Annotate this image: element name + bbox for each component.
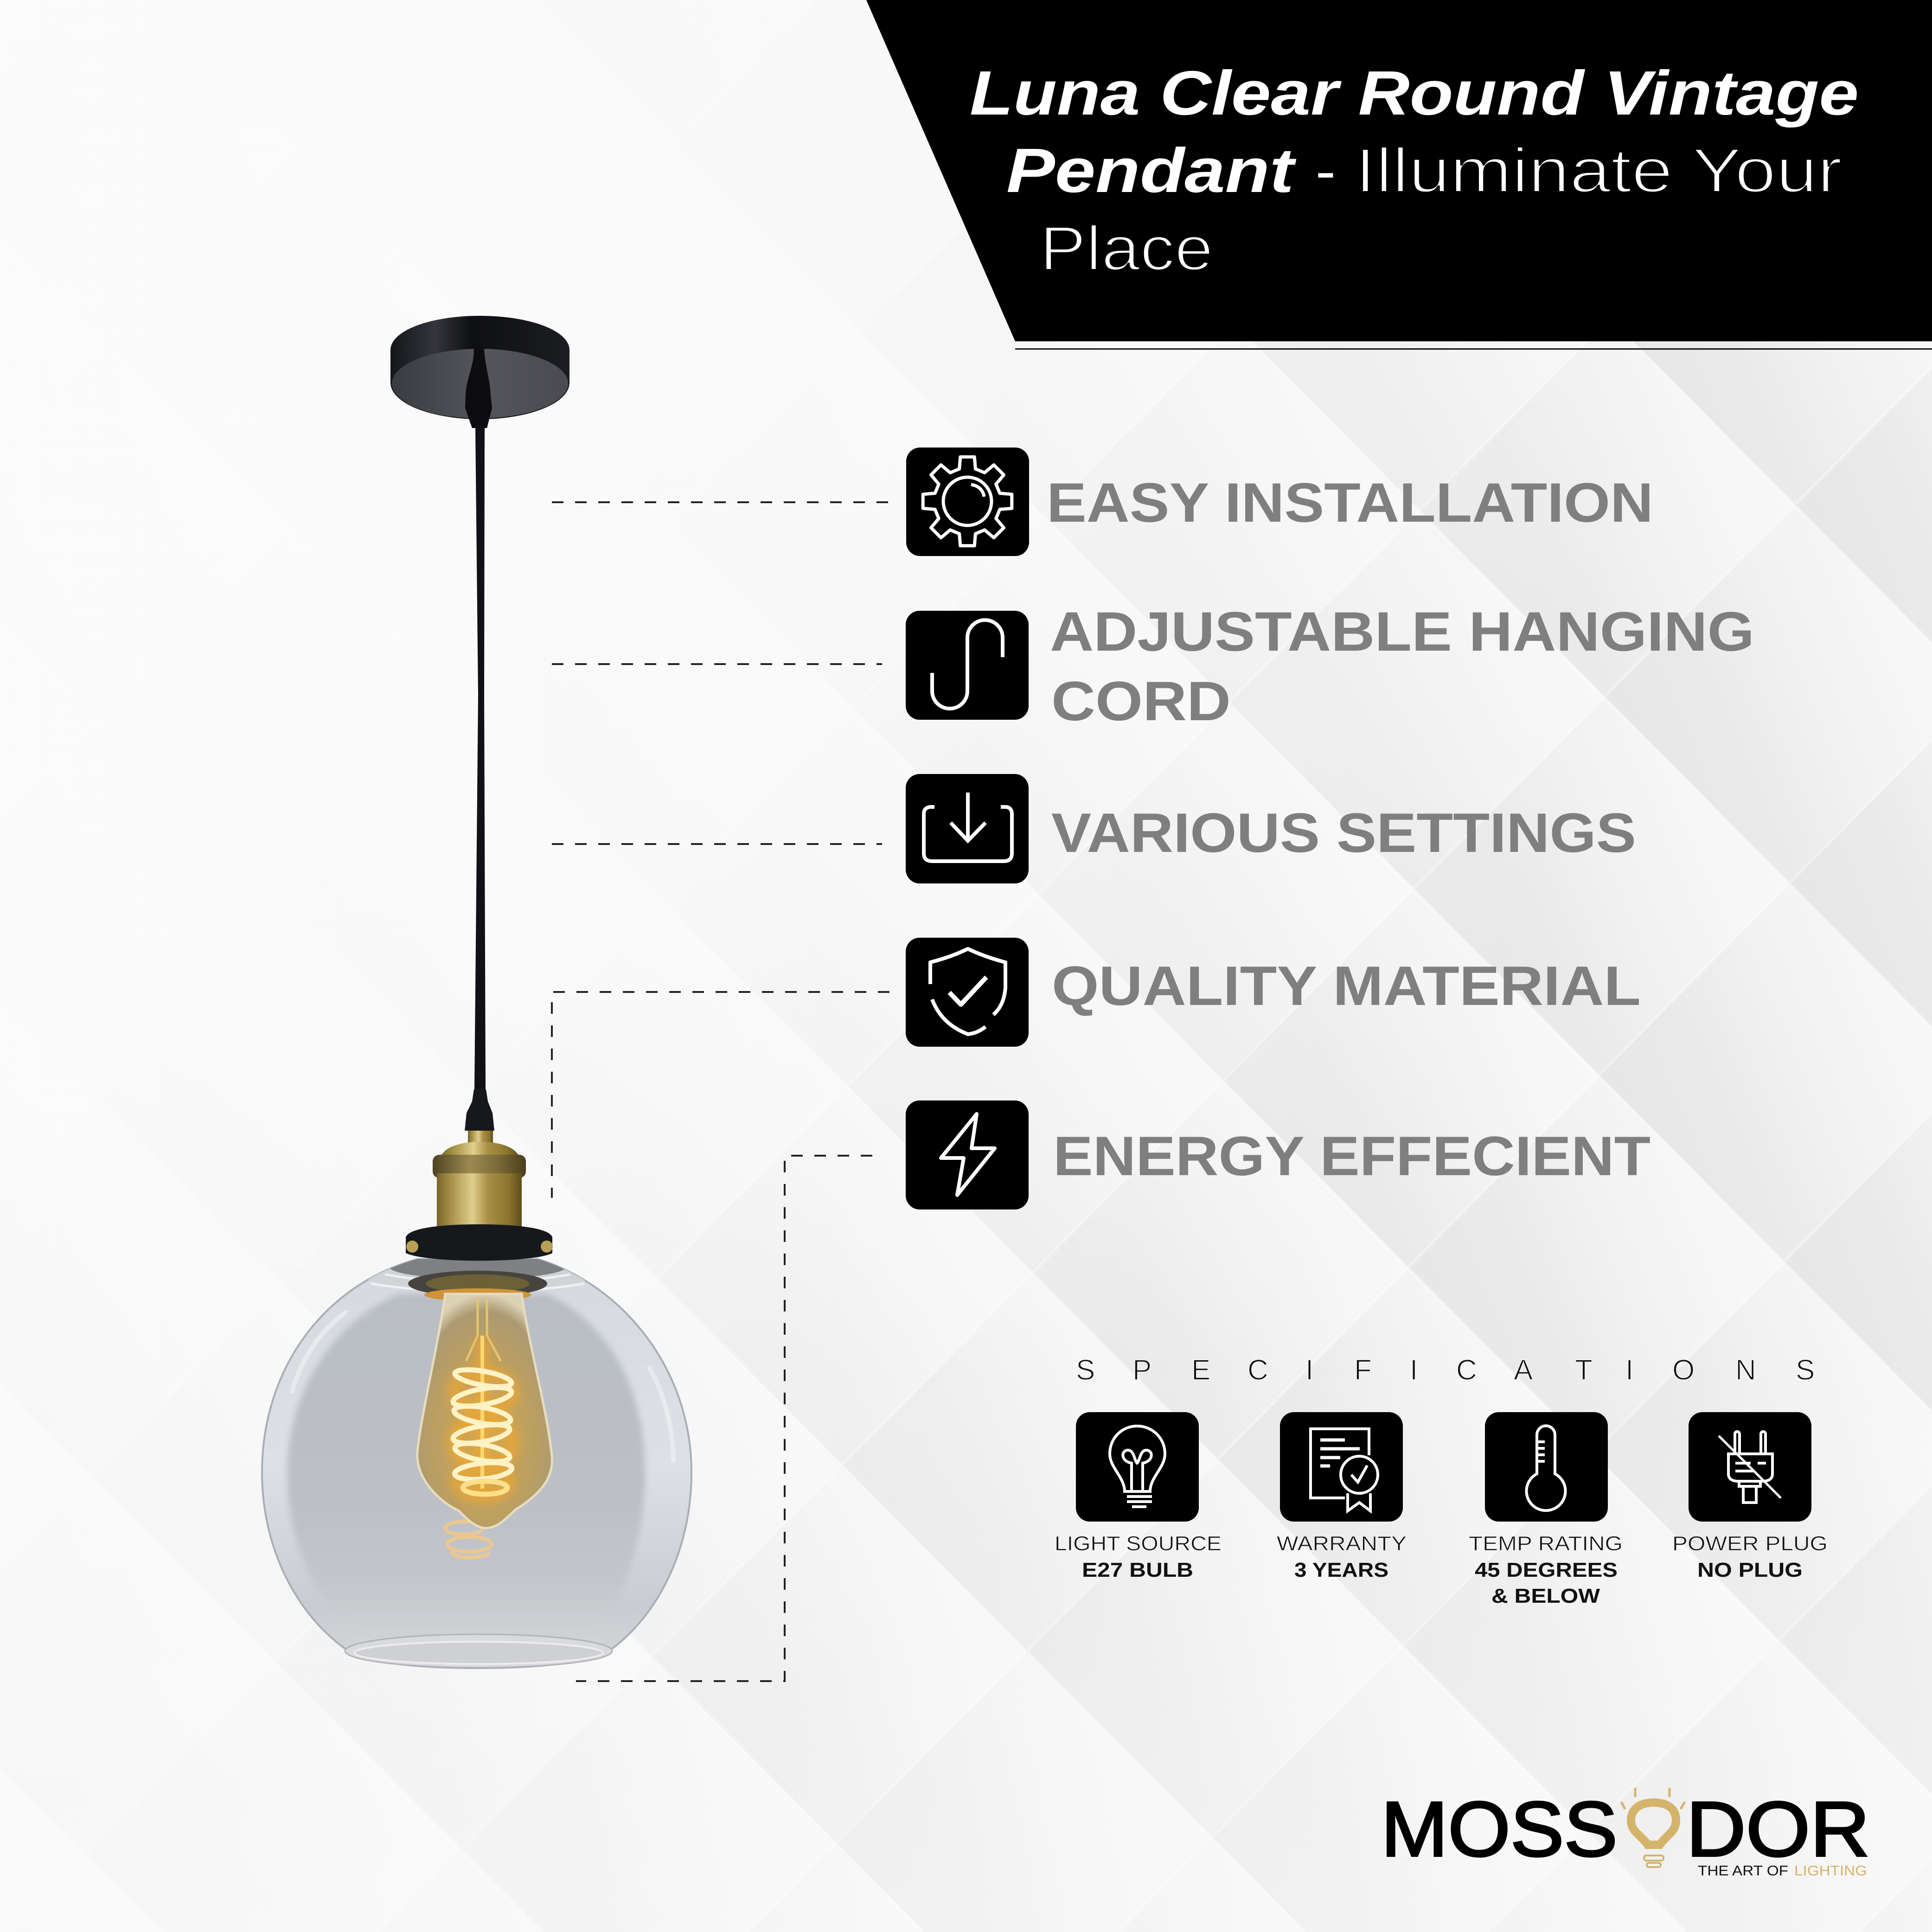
feature: quality material (906, 938, 1641, 1047)
logo: Mossodor: LIGHTING (1794, 1862, 1867, 1879)
feature: easy installation (906, 448, 1653, 556)
icon: crossed plug (1689, 1412, 1811, 1522)
feature: energy effecient: ENERGY EFFECIENT (1053, 1125, 1651, 1187)
feature: adjustable hanging cord: ADJUSTABLE HANGING (1050, 601, 1754, 663)
dashed leader lines (552, 502, 889, 1681)
spec: light source: LIGHT SOURCE (1055, 1532, 1222, 1555)
feature: quality material: QUALITY MATERIAL (1052, 955, 1641, 1017)
spec: power plug: POWER PLUG (1672, 1532, 1828, 1555)
spec: power plug: NO PLUG (1697, 1559, 1803, 1581)
feature: adjustable hanging cord: CORD (1051, 670, 1231, 732)
icon: shield check (906, 938, 1029, 1047)
title text: Illuminate Your (1355, 135, 1842, 205)
spec: warranty: 3 YEARS (1294, 1559, 1388, 1581)
spec: temp rating: 45 DEGREES (1475, 1559, 1618, 1581)
filament glow (454, 1338, 512, 1496)
icon: gear (906, 448, 1029, 556)
feature: various settings (906, 774, 1636, 883)
socket collar (406, 1224, 553, 1260)
glass highlights (292, 1312, 673, 1461)
spec: temp rating: TEMP RATING (1469, 1532, 1623, 1555)
Edison bulb (417, 1294, 552, 1528)
reflected filament (445, 1522, 492, 1558)
glass globe (262, 1254, 691, 1668)
rim (345, 1634, 612, 1668)
spec: temp rating (1469, 1412, 1623, 1607)
title text: Pendant (1006, 135, 1297, 205)
icon: gold bulb (1622, 1789, 1684, 1867)
spec: light source: E27 BULB (1082, 1559, 1193, 1581)
icon: thermometer (1485, 1412, 1608, 1522)
cord (474, 428, 486, 1089)
logo: Mossodor: DOR (1686, 1785, 1870, 1873)
ceiling plate (390, 316, 569, 428)
icon: hook (906, 611, 1029, 720)
specifications heading: SPECIFICATIONS (1076, 1354, 1815, 1386)
spec: temp rating: & BELOW (1491, 1585, 1600, 1607)
title text: Luna Clear Round Vintage (970, 58, 1859, 128)
spec: warranty (1277, 1412, 1407, 1581)
icon: download tray (906, 774, 1029, 883)
icon: lightning bolt (906, 1100, 1029, 1209)
title panel (866, 0, 1932, 350)
title text (970, 58, 1859, 283)
feature: various settings: VARIOUS SETTINGS (1051, 802, 1636, 864)
socket (433, 1089, 526, 1228)
filament (452, 1336, 513, 1494)
icon: bulb (1076, 1412, 1199, 1522)
logo: Mossodor: MOSS (1381, 1785, 1618, 1873)
product: pendant lamp (262, 316, 691, 1668)
logo: Mossodor (1381, 1785, 1870, 1879)
neck ripples (368, 1259, 585, 1300)
spec: warranty: WARRANTY (1277, 1532, 1407, 1555)
feature: easy installation: EASY INSTALLATION (1047, 472, 1653, 534)
logo: Mossodor: THE ART OF (1698, 1862, 1788, 1879)
spec: power plug (1672, 1412, 1828, 1581)
title text: Place (1040, 213, 1213, 283)
feature: energy effecient (906, 1100, 1651, 1209)
spec: light source (1055, 1412, 1222, 1581)
feature: adjustable hanging cord (906, 601, 1754, 732)
icon: certificate (1280, 1412, 1403, 1522)
title text: - (1315, 135, 1336, 205)
